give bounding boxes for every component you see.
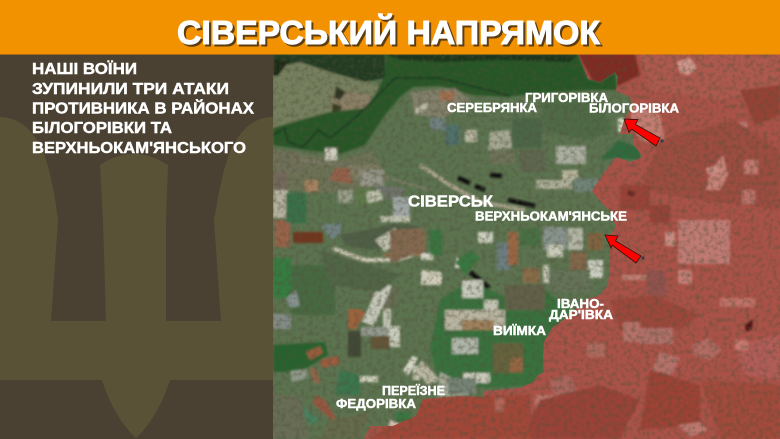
text block: situation summary xyxy=(32,60,254,157)
text block: situation summary: ЗУПИНИЛИ ТРИ АТАКИ xyxy=(32,81,229,98)
text block: situation summary: НАШІ ВОЇНИ xyxy=(32,60,137,78)
label: Siversk: СІВЕРСЬК xyxy=(408,194,493,210)
label: Ivano-Darivka: ДАР'ІВКА xyxy=(549,308,613,322)
red occupied zone xyxy=(364,54,780,439)
map: central farmland xyxy=(273,150,390,195)
red zone: field patches xyxy=(370,54,780,439)
text block: situation summary: ВЕРХНЬОКАМ'ЯНСЬКОГО xyxy=(32,140,246,157)
map labels xyxy=(336,91,679,411)
left panel background xyxy=(0,54,273,439)
label: Serebrianka: СЕРЕБРЯНКА xyxy=(447,101,537,115)
map: Siversk area fields xyxy=(273,190,288,218)
text block: situation summary: ПРОТИВНИКА В РАЙОНАХ xyxy=(32,98,254,118)
label: Verkhnokamianske: ВЕРХНЬОКАМ'ЯНСЬКЕ xyxy=(475,210,627,224)
map: south west fields xyxy=(273,314,291,329)
trident emblem watermark xyxy=(0,117,273,438)
label: Ivano-Darivka: ІВАНО- xyxy=(557,297,604,311)
map: Verkhnokamianske fields xyxy=(390,228,424,262)
map: black ponds xyxy=(458,175,535,206)
map: Vyimka green zone xyxy=(430,280,570,388)
map: northern forest xyxy=(273,54,617,154)
label: Fedorivka: ФЕДОРІВКА xyxy=(336,397,416,411)
label: Bilohorivka: БІЛОГОРІВКА xyxy=(589,102,679,116)
label: Ivano-Darivka xyxy=(549,297,613,322)
label: Vyimka: ВИЇМКА xyxy=(493,323,546,338)
arrow: attack towards Verkhnokamianske xyxy=(605,235,645,263)
satellite map xyxy=(273,54,780,439)
label: Pereizne: ПЕРЕЇЗНЕ xyxy=(382,383,445,398)
map texture xyxy=(273,54,780,439)
map: north west fields xyxy=(273,61,380,129)
red zone: top left dark woodland xyxy=(578,54,640,85)
title: СІВЕРСЬКИЙ НАПРЯМОК xyxy=(177,13,601,51)
header bar xyxy=(0,0,780,54)
arrow: attack towards Bilohorivka xyxy=(624,119,664,146)
text block: situation summary: БІЛОГОРІВКИ ТА xyxy=(32,120,172,137)
label: Hryhorivka: ГРИГОРІВКА xyxy=(525,91,608,105)
